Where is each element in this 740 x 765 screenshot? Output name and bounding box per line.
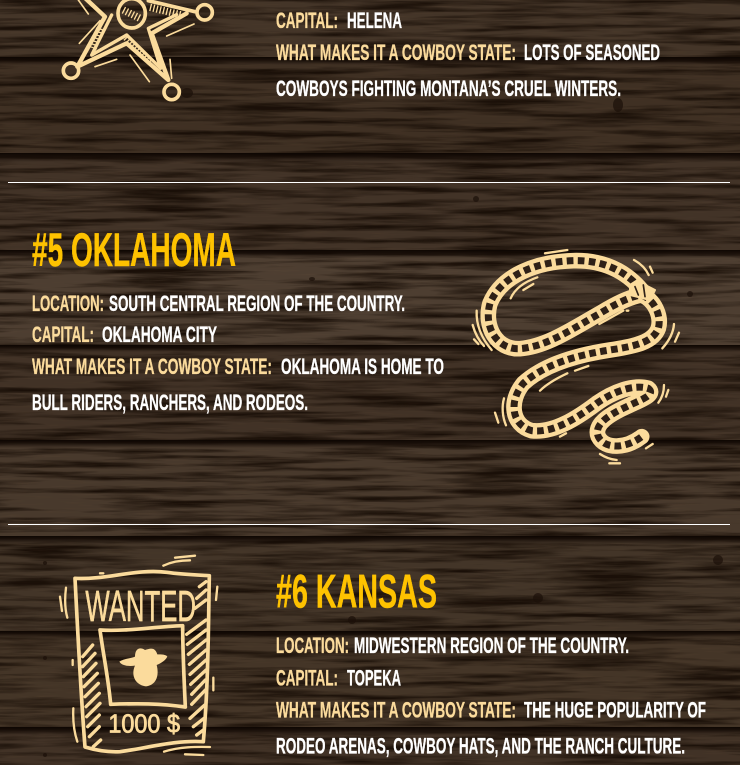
Kansas location row: LOCATION: [276, 633, 349, 658]
Kansas cowboy state row: WHAT MAKES IT A COWBOY STATE: [276, 698, 516, 722]
divider: top [8, 182, 730, 183]
text block: Oklahoma [32, 223, 444, 415]
Kansas cowboy state row [276, 698, 706, 758]
Oklahoma capital row: OKLAHOMA CITY [102, 322, 217, 347]
Oklahoma cowboy state row: BULL RIDERS, RANCHERS, AND RODEOS. [32, 390, 308, 415]
icon: sheriff star [63, 0, 212, 100]
Oklahoma location row: LOCATION: [32, 291, 104, 316]
reward amount: 1000 $ [108, 709, 180, 739]
heading: #5 Oklahoma: #5 OKLAHOMA [32, 223, 236, 276]
Kansas capital row: CAPITAL: [276, 666, 338, 690]
divider: bottom [8, 524, 730, 525]
Kansas capital row: TOPEKA [347, 666, 401, 690]
wanted lettering: WANTED [85, 582, 196, 631]
Oklahoma location row: SOUTH CENTRAL REGION OF THE COUNTRY. [109, 291, 405, 316]
portrait frame [100, 626, 185, 707]
motion marks [60, 556, 217, 755]
Montana cowboy state row [276, 40, 660, 101]
Oklahoma cowboy state row: OKLAHOMA IS HOME TO [281, 354, 444, 379]
poster shading [83, 582, 206, 747]
Montana capital row: CAPITAL: [276, 8, 338, 33]
Oklahoma location row [32, 291, 405, 316]
poster outline [75, 571, 209, 752]
cowboy silhouette [119, 648, 167, 686]
text block: Montana [276, 8, 660, 101]
Kansas location row [276, 633, 629, 658]
icon: lasso rope [473, 250, 679, 463]
Oklahoma capital row [32, 322, 217, 347]
Oklahoma cowboy state row: WHAT MAKES IT A COWBOY STATE: [32, 354, 272, 379]
icon: wanted poster [60, 556, 217, 755]
Oklahoma cowboy state row [32, 354, 444, 415]
Oklahoma capital row: CAPITAL: [32, 322, 94, 347]
Montana cowboy state row: WHAT MAKES IT A COWBOY STATE: [276, 40, 516, 65]
text block: Kansas [276, 564, 706, 758]
Montana capital row: HELENA [347, 8, 402, 33]
heading: #6 Kansas: #6 KANSAS [276, 564, 437, 618]
